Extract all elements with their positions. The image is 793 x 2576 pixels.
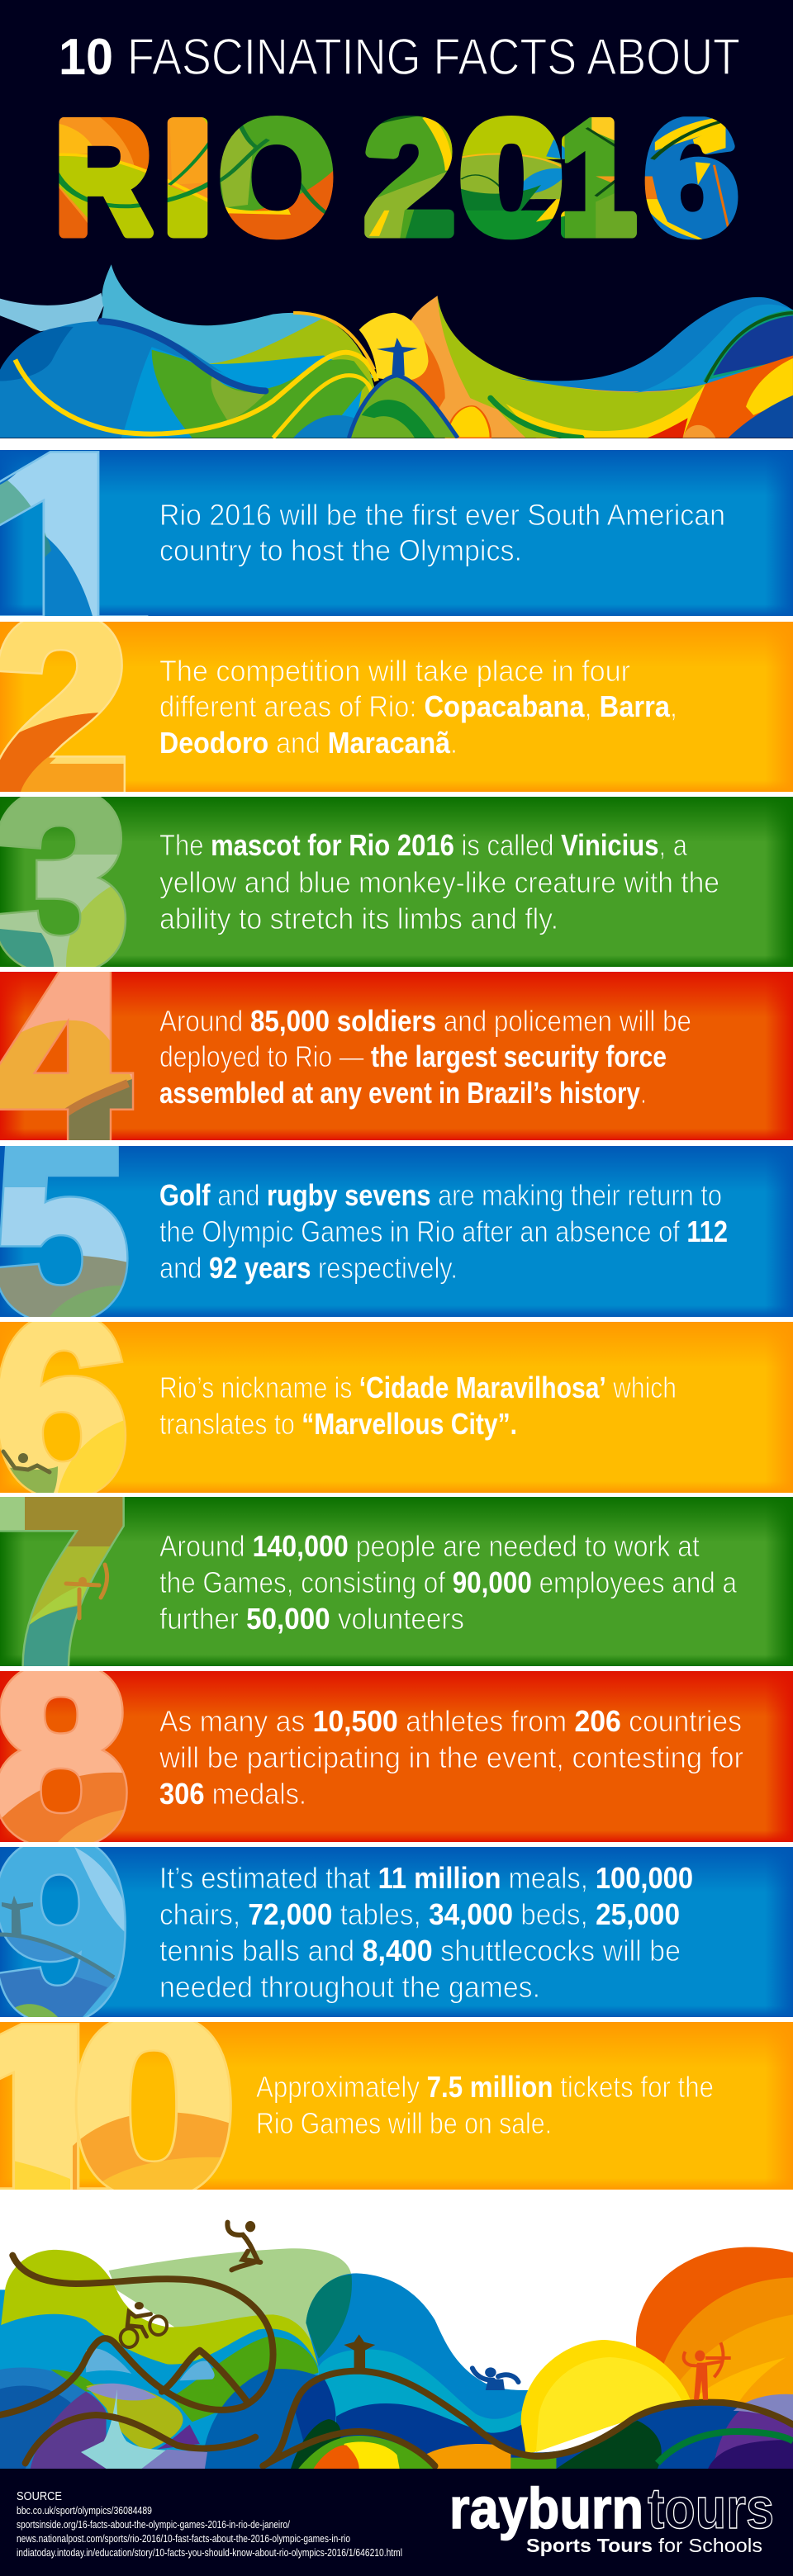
panel: fact 8	[0, 1671, 793, 1842]
numeral 7	[0, 1443, 129, 1721]
text: sources: bbc.co.uk/sport/olympics/36084489	[17, 2504, 152, 2517]
text: fact 6: Rio’s nickname is ‘Cidade Maravilhosa’ which	[159, 1371, 677, 1404]
text: fact 4: assembled at any event in Brazil’s history.	[159, 1076, 647, 1110]
text: sources: news.nationalpost.com/sports/rio-2016/10-fast-facts-about-the-2016-olympic-games-in-rio	[17, 2532, 350, 2545]
text: fact 5: and 92 years respectively.	[159, 1251, 458, 1285]
heading: Rio 2016: O	[219, 88, 335, 268]
text: fact 9: chairs, 72,000 tables, 34,000 beds, 25,000	[159, 1897, 680, 1931]
text: fact 7: Around 140,000 people are needed to work at	[159, 1529, 700, 1563]
panel: fact 6	[0, 1322, 793, 1493]
text: fact 8: will be participating in the event, contesting for	[159, 1740, 743, 1774]
logo: rayburn tours: rayburn	[449, 2476, 643, 2540]
numeral 2	[0, 566, 129, 843]
text: fact 3	[159, 828, 719, 935]
text: fact 5	[159, 1178, 728, 1285]
text: fact 4: deployed to Rio — the largest security force	[159, 1039, 667, 1073]
text: fact 1	[159, 498, 725, 567]
text: fact 2	[159, 654, 677, 760]
icon: Christ statue and hill	[0, 1896, 114, 1977]
text: fact 5: the Olympic Games in Rio after an absence of 112	[159, 1215, 728, 1248]
icon: archer	[684, 2342, 731, 2400]
icon: swimmer	[472, 2367, 519, 2390]
icon: volleyball player	[227, 2221, 260, 2270]
logo: rayburn tours: Sports Tours	[526, 2535, 653, 2556]
text: fact 4: Around 85,000 soldiers and policemen will be	[159, 1004, 691, 1038]
panel: fact 7	[0, 1497, 793, 1666]
text: fact 6: translates to “Marvellous City”.	[159, 1407, 517, 1441]
illustration: header waves and Christ the Redeemer	[0, 264, 793, 438]
text: fact 3: yellow and blue monkey-like creature with the	[159, 865, 719, 899]
text: sources	[17, 2489, 402, 2559]
logo: rayburn tours	[449, 2476, 774, 2556]
panel: header	[0, 0, 793, 438]
text: fact 8	[159, 1704, 743, 1811]
panel: footer	[0, 2469, 793, 2576]
text: fact 9: needed throughout the games.	[159, 1970, 540, 2004]
text: sources: indiatoday.intoday.in/education/story/10-facts-you-should-know-about-rio-olympics-2016/1/646210.html	[17, 2546, 402, 2559]
text: fact 6	[159, 1371, 677, 1441]
text: fact 1: Rio 2016 will be the first ever South American	[159, 498, 725, 532]
decorative path: brown road lines	[0, 2256, 793, 2466]
icon: Christ the Redeemer	[344, 2334, 375, 2371]
text: fact 2: Deodoro and Maracanã.	[159, 726, 458, 760]
heading: Rio 2016: 6	[644, 88, 738, 268]
numeral 10	[0, 1967, 236, 2283]
logo: rayburn tours: for Schools	[658, 2535, 762, 2556]
panel: fact 2	[0, 622, 793, 792]
heading: Rio 2016: I	[161, 88, 214, 268]
panel: fact 9	[0, 1847, 793, 2017]
text: fact 2: different areas of Rio: Copacabana, Barra,	[159, 689, 677, 723]
icon: swimmer	[3, 1451, 50, 1472]
text: fact 2: The competition will take place in four	[159, 654, 630, 688]
panel: fact 5	[0, 1146, 793, 1317]
panel: fact 1	[0, 450, 793, 616]
text: fact 4	[159, 1004, 691, 1110]
heading: Rio 2016: 0	[459, 88, 563, 268]
heading: Rio 2016	[55, 88, 738, 268]
text: sources: sportsinside.org/16-facts-about-the-olympic-games-2016-in-rio-de-janeiro/	[17, 2518, 290, 2531]
text: fact 7: further 50,000 volunteers	[159, 1602, 464, 1636]
text: fact 9: tennis balls and 8,400 shuttlecocks will be	[159, 1934, 681, 1968]
text: fact 3: The mascot for Rio 2016 is called Vinicius, a	[159, 828, 688, 862]
numeral 3	[0, 741, 129, 1019]
text: fact 8: As many as 10,500 athletes from 206 countries	[159, 1704, 742, 1738]
numeral 5	[0, 1091, 129, 1368]
text: fact 7: the Games, consisting of 90,000 employees and a	[159, 1565, 738, 1599]
heading: Rio 2016: R	[55, 88, 152, 268]
text: fact 1: country to host the Olympics.	[159, 533, 522, 567]
numeral 9	[0, 1791, 129, 2068]
title: 10	[59, 29, 113, 86]
logo: rayburn tours: tours	[648, 2476, 774, 2540]
text: fact 9	[159, 1861, 693, 2004]
heading: Rio 2016: 1	[557, 88, 636, 268]
text: fact 10: Rio Games will be on sale.	[256, 2106, 552, 2140]
icon: cyclist	[121, 2302, 167, 2347]
panel: fact 4	[0, 972, 793, 1140]
numeral 4	[0, 914, 131, 1191]
illustration: bottom landscape with athletes	[0, 2190, 793, 2469]
text: fact 10: Approximately 7.5 million tickets for the	[256, 2070, 714, 2104]
text: sources: SOURCE	[17, 2489, 62, 2503]
text: fact 8: 306 medals.	[159, 1777, 306, 1811]
text: fact 7	[159, 1529, 738, 1636]
text: fact 3: ability to stretch its limbs and fly.	[159, 902, 558, 935]
icon: archer	[66, 1565, 107, 1618]
text: fact 9: It’s estimated that 11 million meals, 100,000	[159, 1861, 693, 1895]
panel: fact 3	[0, 797, 793, 967]
numeral 6	[0, 1267, 129, 1544]
text: fact 5: Golf and rugby sevens are making their return to	[159, 1178, 722, 1212]
numeral 8	[0, 1616, 129, 1893]
heading: Rio 2016: 2	[364, 88, 455, 268]
text: fact 10	[256, 2070, 714, 2140]
panel: fact 10	[0, 2022, 793, 2190]
numeral 1	[0, 397, 150, 711]
